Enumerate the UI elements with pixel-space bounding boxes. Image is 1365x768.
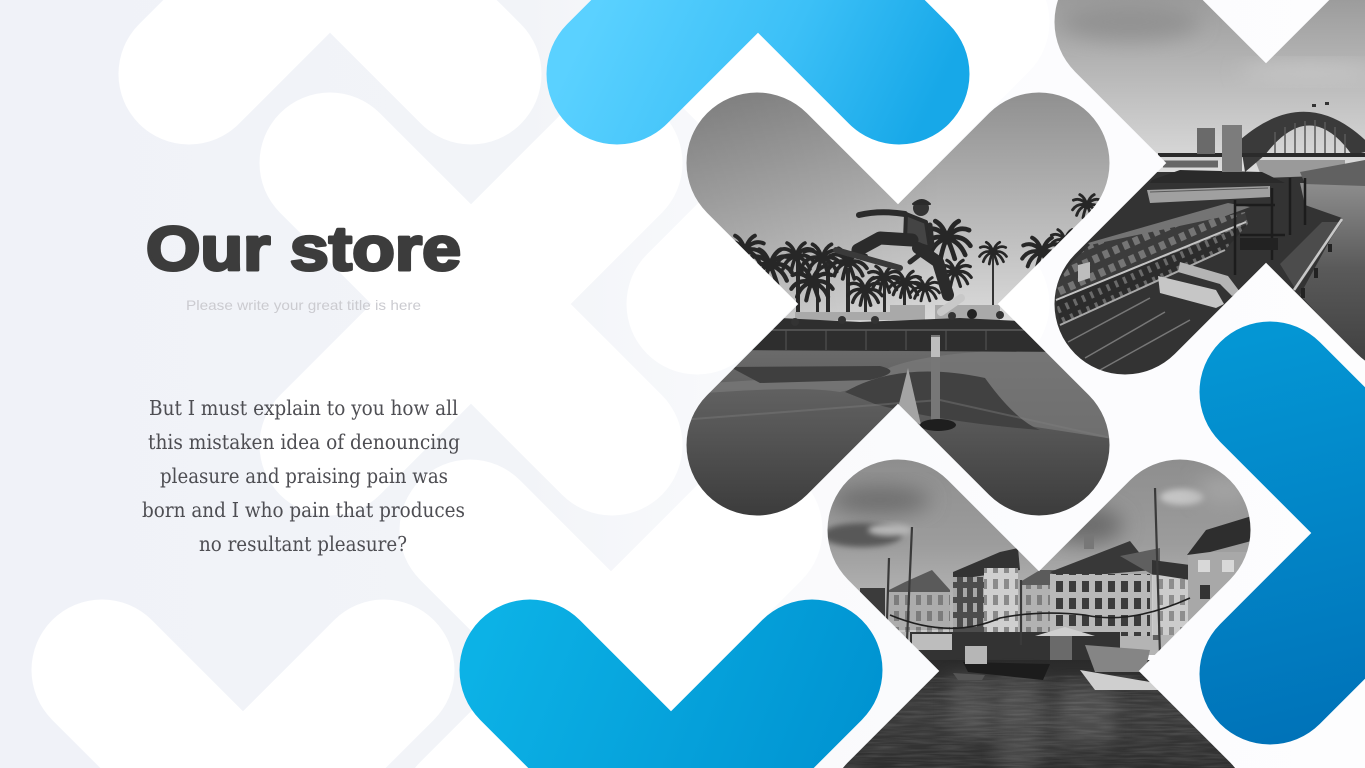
photo: harbour bridge in a cross <box>1040 0 1365 382</box>
body text <box>142 396 465 556</box>
crowd and fence <box>752 318 1046 352</box>
subtitle: Please write your great title is here <box>186 297 421 313</box>
photo: harbour canal houses in a cross <box>820 455 1260 768</box>
boats and masts <box>963 662 1050 680</box>
pier <box>1280 222 1342 290</box>
scaffold <box>1235 178 1305 275</box>
blue cross: right <box>1270 392 1365 674</box>
wharf lower storey <box>1056 224 1248 325</box>
body text: pleasure and praising pain was <box>160 464 448 488</box>
title: Our store <box>146 215 461 284</box>
houses left <box>860 588 885 620</box>
water <box>843 660 1235 768</box>
water <box>1300 183 1365 365</box>
body text: no resultant pleasure? <box>199 532 407 556</box>
body text: But I must explain to you how all <box>149 396 458 420</box>
traffic cone and pole <box>897 368 921 425</box>
background pattern: white crosses <box>102 0 979 768</box>
body text: born and I who pain that produces <box>142 498 465 522</box>
rails <box>1068 298 1190 370</box>
photo: skateboarder in a cross <box>680 90 1120 518</box>
house right <box>1188 552 1252 622</box>
distant buildings <box>795 305 1000 320</box>
blue cross: top <box>617 0 899 74</box>
white train cars <box>1158 276 1224 308</box>
skateboarder <box>836 200 961 312</box>
wharf upper storey <box>1056 212 1248 300</box>
bridge <box>1158 112 1365 172</box>
wharf roof <box>1088 203 1250 247</box>
houses centre <box>1022 570 1055 632</box>
palm trees <box>733 193 1100 312</box>
quay market <box>910 632 1120 660</box>
blue cross: bottom <box>530 670 812 768</box>
body text: this mistaken idea of denouncing <box>148 430 460 454</box>
far skyline and shore <box>1255 160 1345 178</box>
far terminal <box>1147 186 1270 203</box>
